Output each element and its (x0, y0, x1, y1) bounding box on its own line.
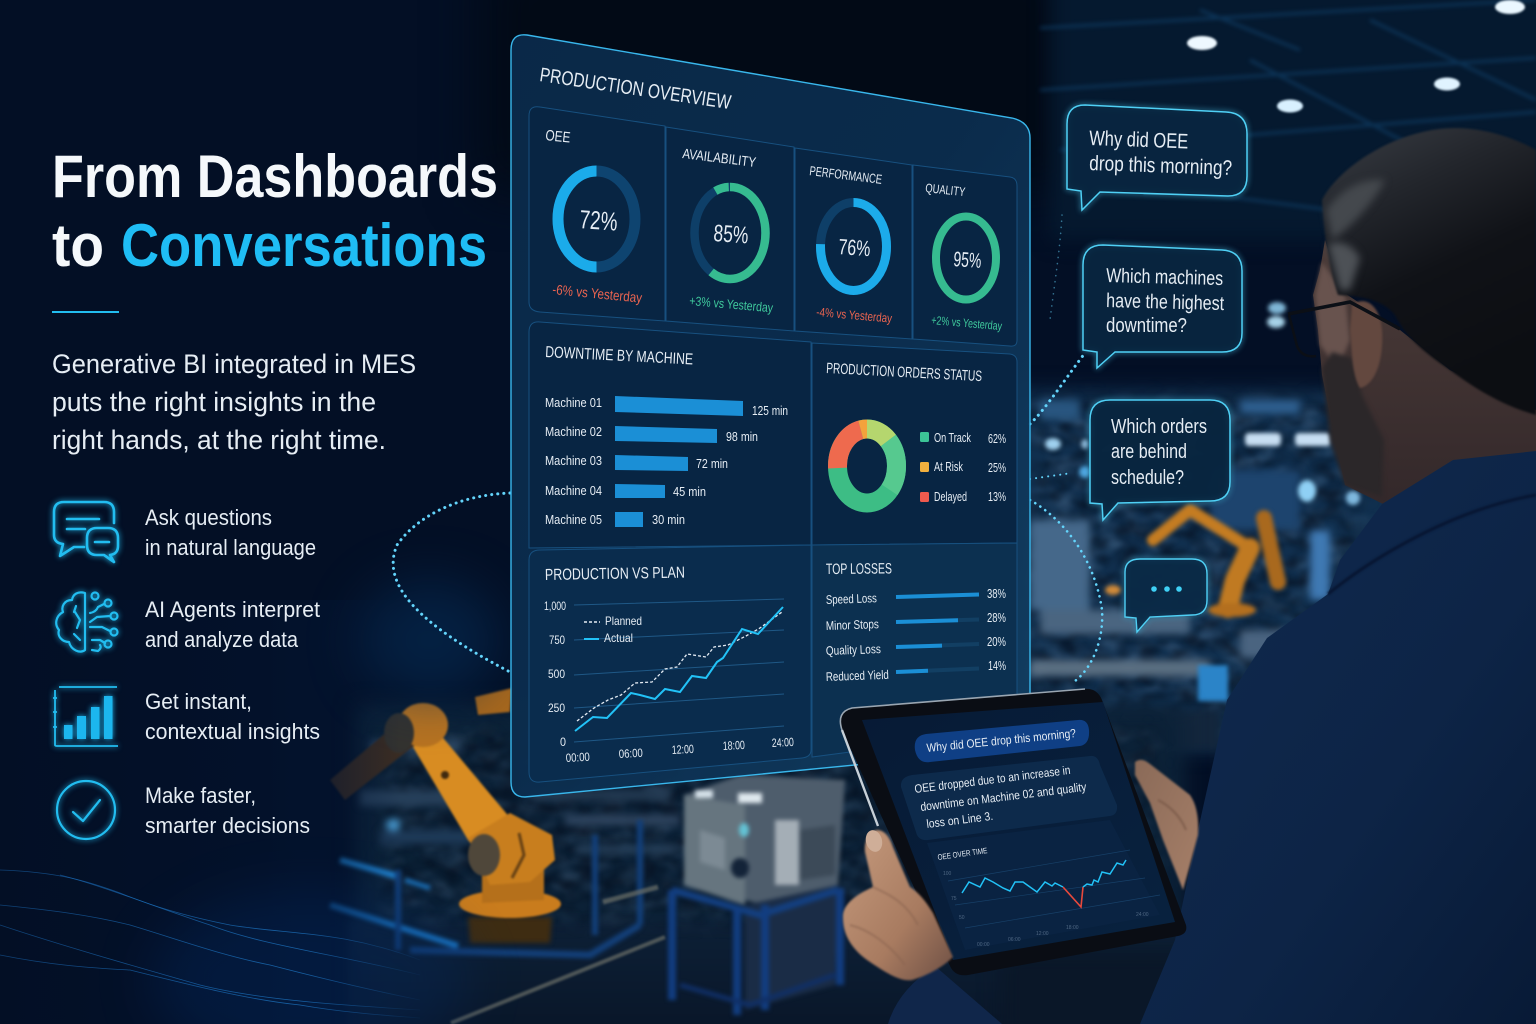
horizontal bars: 20% (987, 635, 1006, 649)
line chart: 500 (548, 667, 565, 681)
chat bubble: which machines: have the highest (1106, 290, 1225, 315)
chat bubble: which orders (1090, 400, 1230, 520)
factory floor area behind bubbles (1030, 298, 1382, 758)
line chart (544, 599, 794, 765)
bar chart: Machine 03 (545, 453, 602, 468)
answer card: OEE dropped due to an increase in (914, 763, 1071, 796)
feature text: Get instant, (145, 689, 252, 714)
card: production vs plan (529, 545, 811, 782)
OEE over time chart: 100 (943, 871, 952, 877)
ear (1350, 301, 1382, 388)
feature text: Ask questions (145, 505, 272, 530)
feature text: in natural language (145, 535, 316, 560)
horizontal bars: 14% (988, 659, 1006, 673)
line chart: 00:00 (565, 750, 590, 765)
card: production orders status (812, 343, 1017, 545)
horizontal bars: Speed Loss (826, 591, 877, 607)
chart legend (584, 614, 642, 645)
title: From Dashboards (52, 143, 498, 210)
panel heading: PRODUCTION OVERVIEW (538, 64, 733, 114)
donut: 95% (936, 216, 996, 300)
person (1140, 128, 1536, 1024)
bar chart (545, 395, 788, 527)
feature: AI agents (56, 592, 320, 652)
chat bubble: which orders: are behind (1111, 441, 1187, 463)
legend: At Risk (934, 460, 964, 474)
robot arm right (background) (1153, 510, 1278, 617)
feature text: contextual insights (145, 719, 320, 744)
card: OEE: 72% (579, 204, 619, 237)
line chart: 06:00 (618, 746, 643, 761)
line chart: 250 (548, 701, 565, 715)
connector: left dotted arc (393, 493, 510, 672)
card: quality: QUALITY (925, 181, 966, 199)
decorative wave lines (0, 870, 420, 1018)
donut: 72% (558, 171, 635, 267)
donut: 85% (694, 187, 766, 279)
chat bubble: why did OEE drop: Why did OEE (1089, 127, 1189, 153)
feature text (145, 783, 310, 838)
OEE over time chart: 75 (951, 896, 957, 902)
subtitle text (52, 349, 416, 455)
card: performance: PERFORMANCE (809, 163, 883, 187)
OEE over time chart: 12:00 (1036, 931, 1049, 937)
answer card: downtime on Machine 02 and quality (920, 780, 1087, 814)
cheek (1315, 262, 1350, 368)
feature: ask questions (54, 502, 316, 562)
icon: chat bubbles (54, 502, 118, 562)
line chart: 1,000 (544, 599, 566, 613)
bar chart: Machine 01 (545, 395, 602, 410)
card: top losses: TOP LOSSES (826, 560, 892, 578)
chat bubble: which machines: Which machines (1106, 265, 1223, 290)
card: performance: 76% (838, 234, 871, 261)
subtitle text: Generative BI integrated in MES (52, 349, 416, 379)
bar chart: Machine 02 (545, 424, 602, 439)
feature text: smarter decisions (145, 813, 310, 838)
conveyor table left (330, 820, 640, 955)
left hand (843, 828, 953, 980)
bar chart: 72 min (696, 457, 728, 471)
connector: right dotted arcs (1030, 215, 1102, 681)
line chart: 0 (560, 735, 566, 749)
card: availability: +3% vs Yesterday (689, 293, 774, 315)
feature text: AI Agents interpret (145, 597, 320, 622)
bottom-left blue tint (150, 890, 470, 1024)
tablet screen (862, 702, 1175, 960)
donut: 76% (820, 202, 886, 290)
panel background (511, 35, 1030, 797)
answer card: loss on Line 3. (926, 809, 994, 831)
title (52, 143, 498, 279)
feature text (145, 689, 320, 744)
shirt (1140, 451, 1536, 1024)
tablet frame (840, 689, 1186, 975)
card: top losses (812, 543, 1017, 757)
legend: 25% (988, 461, 1006, 475)
chat bubble: why did OEE drop: drop this morning? (1089, 152, 1233, 180)
chat bubble: which machines: downtime? (1106, 315, 1187, 337)
icon: brain circuit (56, 592, 118, 652)
card: OEE: OEE (545, 127, 571, 147)
bar chart: 45 min (673, 485, 706, 499)
card: OEE (529, 107, 665, 321)
icon: bar chart (53, 687, 118, 746)
card: performance (795, 148, 912, 339)
robot arm foreground (330, 688, 561, 943)
legend: Delayed (934, 490, 967, 504)
card: OEE: -6% vs Yesterday (552, 281, 643, 306)
line chart: 750 (549, 633, 565, 647)
card: performance: -4% vs Yesterday (816, 305, 893, 326)
chat bubble: which orders: schedule? (1111, 467, 1184, 489)
beard (1322, 352, 1384, 497)
title divider (52, 311, 119, 313)
legend (920, 431, 1006, 504)
feature: decisions (57, 781, 310, 839)
card: downtime by machine: DOWNTIME BY MACHINE (545, 344, 693, 368)
subtitle text: puts the right insights in the (52, 387, 376, 417)
line chart: 24:00 (771, 735, 794, 750)
OEE over time chart: 24:00 (1136, 912, 1149, 918)
horizontal bars: 38% (987, 587, 1006, 601)
card: downtime by machine (529, 322, 811, 548)
bar chart: 30 min (652, 513, 685, 527)
bar chart: 98 min (726, 430, 758, 444)
bar chart: 125 min (752, 404, 788, 418)
card: production vs plan: PRODUCTION VS PLAN (545, 565, 685, 584)
legend: 13% (988, 490, 1006, 504)
OEE over time chart: 00:00 (977, 942, 990, 948)
bar chart: Machine 05 (545, 512, 602, 527)
OEE over time chart: 50 (959, 915, 965, 921)
donut chart (838, 429, 896, 503)
card: availability (666, 127, 794, 331)
OEE over time chart: 06:00 (1008, 937, 1021, 943)
feature text: Make faster, (145, 783, 256, 808)
OEE over time chart: OEE OVER TIME (937, 846, 988, 862)
feature text: and analyze data (145, 627, 299, 652)
machine on blue table (672, 775, 845, 1015)
line chart: 18:00 (722, 738, 745, 753)
collar fold (1328, 495, 1536, 594)
OEE over time chart (927, 820, 1160, 950)
feature: insights (53, 687, 320, 746)
chart legend: Actual (604, 631, 633, 645)
panel: production overview (511, 35, 1030, 797)
question pill (915, 720, 1089, 762)
card: quality: +2% vs Yesterday (931, 313, 1003, 333)
bar chart: Machine 04 (545, 483, 602, 498)
hair (1322, 128, 1536, 415)
chat bubble: typing dots (1125, 559, 1207, 632)
subtitle text: right hands, at the right time. (52, 425, 386, 455)
chat bubble: which orders: Which orders (1111, 416, 1207, 438)
card: availability: 85% (713, 220, 749, 249)
tablet (840, 689, 1186, 975)
legend: 62% (988, 432, 1006, 446)
neck and face (1313, 240, 1536, 505)
card: availability: AVAILABILITY (682, 145, 758, 170)
feature text (145, 597, 320, 652)
chart legend: Planned (605, 614, 642, 628)
blue glow (360, 580, 500, 700)
card: production orders status: PRODUCTION ORDERS STATUS (826, 360, 982, 385)
horizontal bars: Minor Stops (826, 617, 879, 633)
floor lines (451, 887, 665, 1023)
legend: On Track (934, 431, 972, 445)
title: to (52, 212, 104, 279)
line chart: 12:00 (671, 742, 694, 757)
tablet: Why did OEE drop this morning? (926, 726, 1077, 755)
right hand (1135, 760, 1198, 890)
feature text (145, 505, 316, 560)
factory ceiling (1040, 0, 1536, 240)
horizontal bars: 28% (987, 611, 1006, 625)
horizontal bars: Quality Loss (826, 642, 881, 658)
left fade overlay (0, 600, 400, 1024)
card: quality (913, 165, 1017, 346)
horizontal bars: Reduced Yield (826, 668, 889, 684)
lower scene: shelving and floor (330, 700, 1200, 1024)
OEE over time chart: 18:00 (1066, 925, 1079, 931)
chat bubble: why did OEE drop (1067, 105, 1247, 210)
chat bubble: which machines (1083, 245, 1242, 368)
answer card (901, 756, 1117, 840)
icon: check circle (57, 781, 115, 839)
glasses (1288, 302, 1400, 356)
card: quality: 95% (953, 248, 982, 273)
horizontal bars (826, 587, 1006, 684)
title: Conversations (121, 212, 487, 279)
left sleeve (888, 966, 1002, 1024)
